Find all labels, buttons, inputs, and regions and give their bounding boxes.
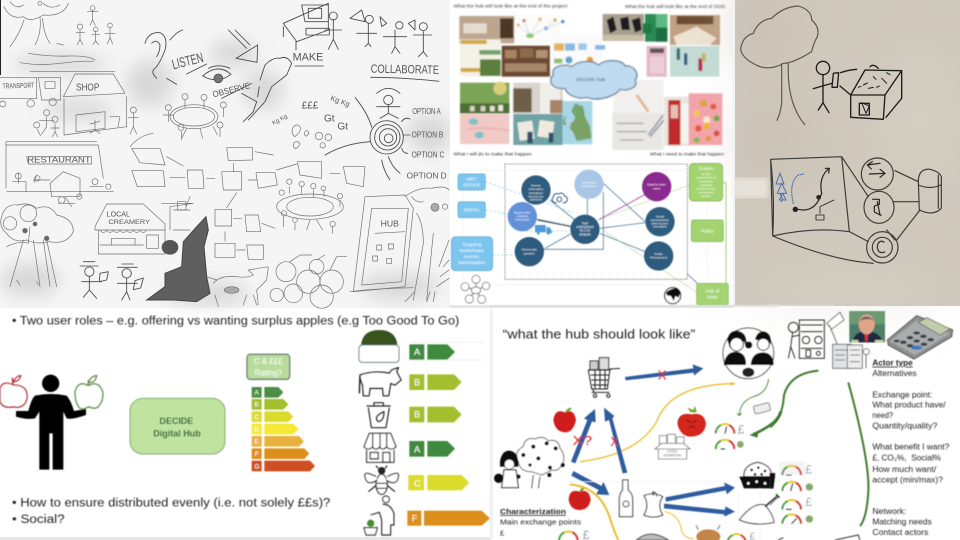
- node: social supermarkets: other buyers,: [651, 221, 669, 225]
- panel: whiteboard photo: [733, 0, 960, 306]
- sketch: hub phone and tree: [350, 187, 449, 302]
- text: characterization: £: [500, 528, 505, 537]
- box: MET OFFICE: MET: [467, 177, 477, 182]
- icon: banknote roll: [753, 403, 771, 414]
- sketch: collaborate with options spiral: COLLABORATE: [371, 62, 439, 77]
- image: portrait on money background: [849, 311, 885, 342]
- arrow: trolley to consumers, crossed: [625, 364, 703, 382]
- node: hub underpinned by LCA: underpinned: [576, 225, 594, 229]
- icon: consumers eating: [723, 328, 774, 379]
- node: hub underpinned by LCA: 'Hub': [581, 221, 588, 225]
- node: information: [574, 170, 604, 199]
- text: actor type and questions: Exchange point:: [872, 390, 932, 399]
- icon: small actor network: [461, 275, 490, 303]
- headings: end of project and end of 2025: What the hub will look like at the end of the project: [453, 3, 568, 9]
- icon: cloud sync: [552, 193, 567, 203]
- headings: end of project and end of 2025: What the hub will look like at the end of 2025: [625, 4, 725, 10]
- rating row: food waste F: F: [412, 514, 418, 524]
- sketch: transport truck and shop: SHOP: [76, 83, 100, 94]
- headings: what I will do and what I need: [453, 152, 724, 158]
- chart: energy style rating ladder A to G: F: [255, 451, 259, 458]
- bullets: even distribution and social: • Social?: [12, 512, 65, 526]
- sketch: hub phone and tree: HUB: [381, 219, 399, 229]
- box: DECIDE Digital Hub: [130, 398, 225, 454]
- icon: calculator: [887, 316, 953, 359]
- node: data for other users: Data for other: [648, 183, 666, 187]
- whiteboard: map and service diagram: [771, 157, 941, 263]
- arrow: core to cake: [665, 482, 735, 502]
- box: MET OFFICE: OFFICE: [463, 182, 480, 187]
- text: actor type and questions: £, CO₂%, Social%: [872, 453, 941, 462]
- connectors between network nodes: [485, 182, 726, 293]
- bullet: two user roles: • Two user roles – e.g. offering vs wanting surplus apples (e.g Too Good To Go): [12, 313, 459, 327]
- headings: end of project and end of 2025: [453, 3, 725, 10]
- sketch: transport truck and shop: [0, 72, 138, 137]
- icon: gauges with pound and money bag, top group: £: [738, 422, 745, 436]
- node: supply chain mapping: mapping: [517, 214, 528, 218]
- box: guides: (ie hub: [701, 172, 711, 176]
- icon: gauges with pound and money bag, lower group: £: [805, 495, 812, 509]
- sketch: lower left tree: [1, 204, 73, 287]
- node: farmer information: partners): [530, 198, 542, 202]
- icon: animal head: [696, 525, 720, 540]
- headings: what I will do and what I need: What I will do to make that happen: [453, 152, 532, 158]
- headings: what I will do and what I need: What I need to make that happen: [650, 152, 724, 158]
- arrow: processing to trolley, crossed: X: [610, 435, 619, 449]
- node: community growers: [515, 237, 544, 266]
- sketch: collaborate with options spiral: [325, 62, 447, 180]
- icon: cider bottle: [619, 480, 633, 517]
- chart: energy style rating ladder A to G: D: [254, 426, 259, 433]
- rating row: shop A: [364, 433, 455, 462]
- rating row: bee C: [365, 466, 469, 494]
- arrow: yellow path to consumers: [580, 384, 732, 462]
- rating row: land A: A: [414, 347, 421, 357]
- node: community growers: growers: [524, 251, 535, 255]
- sketch: money, hearts, carbon scribbles: Gt: [337, 121, 348, 132]
- text: characterization: Characterization: [500, 507, 566, 516]
- sketch: listen ear, observe eye, hand: OBSERVE: [211, 80, 251, 99]
- chart: energy style rating ladder A to G: C: [254, 414, 259, 421]
- image collage: end of project: [459, 14, 605, 145]
- box: guides: naturalism: [699, 179, 713, 183]
- box: policy: [691, 220, 723, 242]
- sketch: restaurant: RESTAURANT: [27, 155, 91, 165]
- icon: delivery truck: [535, 225, 552, 235]
- sketch: money, hearts, carbon scribbles: Kg Kg: [329, 93, 351, 109]
- panel: hub network diagram: [450, 152, 733, 308]
- text: characterization: Main exchange points: [500, 518, 581, 527]
- node: supply chain mapping: information: [515, 218, 530, 222]
- box: ongoing workshops: events,: [464, 254, 480, 260]
- icon: food donation box: DONATION: [664, 454, 682, 458]
- icon: stick figure at vending machine: [788, 320, 824, 358]
- icon: shopping trolley: [588, 358, 620, 397]
- sketch: collaborate with options spiral: OPTION C: [412, 150, 445, 159]
- icon: apple core: [644, 492, 663, 517]
- text: actor type and questions: What product have/: [872, 401, 946, 410]
- rating row: compost bin B: [367, 403, 462, 428]
- icon: food donation box: FOOD: [668, 450, 678, 454]
- chart: energy style rating ladder A to G: E: [254, 439, 259, 446]
- dotted boundary: [505, 164, 687, 279]
- box: DEFRA: DEFRA: [464, 207, 480, 212]
- node: farmer information: (including /: [529, 191, 543, 195]
- box: DEFRA: [458, 202, 485, 218]
- node: social supermarkets: Social: [656, 215, 664, 219]
- text: actor type and questions: accept (min/max)?: [872, 475, 944, 484]
- node: information: information: [582, 184, 597, 188]
- text: actor type and questions: Quantity/quality?: [872, 422, 938, 431]
- icon: angry apple: [677, 406, 706, 437]
- rating row: shop A: A: [414, 444, 421, 454]
- box outline around processed products: [567, 482, 780, 540]
- sketch: process flow boxes: [130, 133, 365, 259]
- node: public procurement: Public: [655, 252, 663, 256]
- text: actor type and questions: need?: [872, 411, 894, 420]
- arrow: green curve down to outcomes: [848, 382, 868, 526]
- box: ongoing workshops: participation: [459, 260, 486, 266]
- box: guides: aware): [701, 194, 711, 198]
- box: guides: contextually: [698, 190, 714, 194]
- panel: actor characteristics: [770, 305, 953, 540]
- sketch: money, hearts, carbon scribbles: £££: [302, 100, 319, 111]
- image collage: end of 2025: [603, 14, 722, 150]
- icon: money flag and tax desk: [827, 312, 869, 368]
- cloud: DECIDE Hub: [551, 61, 637, 99]
- node: data for other users: users: [653, 186, 661, 190]
- sketch: local creamery shop: CREAMERY: [108, 220, 150, 226]
- text: actor type and questions: Alternatives: [872, 369, 917, 378]
- node: hub underpinned by LCA: analysis: [579, 232, 591, 236]
- icon: cake: [739, 462, 775, 488]
- rating row: compost bin B: B: [414, 410, 420, 420]
- arrow: processing to trolley, crossed: [604, 408, 627, 473]
- sketch: transport truck and shop: TRANSPORT: [2, 81, 35, 91]
- icon: gauges with pound and money bag, lower group: [779, 462, 813, 524]
- icon: gauges with pound and money bag, top group: [716, 422, 745, 449]
- chart: energy style rating ladder A to G: A: [254, 390, 259, 397]
- icon: red apple: [553, 408, 576, 432]
- arrow: thick green into gauges: [753, 412, 781, 434]
- box: policy: Policy: [701, 228, 714, 233]
- node: public procurement: Procurement: [650, 256, 667, 260]
- box: guides: underpinned by: [696, 176, 717, 180]
- box: DECIDE Digital Hub: Digital Hub: [153, 428, 201, 438]
- text: characterization: [500, 507, 581, 537]
- box: guides: operating: [700, 183, 713, 187]
- box: guides: Guides: [699, 166, 714, 171]
- arrow: yellow thick path down: [570, 484, 618, 540]
- arrow: thick green head: [749, 431, 759, 438]
- box: hub of hubs: [697, 283, 728, 305]
- node: farmer information: Farmer: [531, 184, 541, 188]
- box: C and pounds rating question: [247, 354, 290, 379]
- panel: pencil sketch of the food hub: [0, 0, 453, 308]
- text: actor type and questions: Network:: [872, 507, 906, 516]
- icon: globe: [665, 288, 681, 304]
- icon: person weighing two apples: [0, 375, 103, 470]
- rating row: cow B: [359, 368, 462, 396]
- node: social supermarkets: supermarkets,: [651, 218, 670, 222]
- node: information: Information: [582, 180, 596, 184]
- sketch: second round table: [277, 179, 343, 233]
- sketch: money, hearts, carbon scribbles: Gt: [324, 114, 335, 125]
- box: guides: [689, 163, 723, 201]
- box: ongoing workshops: [451, 237, 493, 271]
- bullets: even distribution and social: [12, 495, 331, 526]
- node: supply chain mapping: [508, 202, 537, 231]
- text: actor type and questions: Contact actors: [872, 528, 928, 537]
- arrow: thin yellow to livestock: [665, 512, 693, 539]
- text: actor type and questions: Matching needs: [872, 518, 932, 527]
- icon: gauges with pound and money bag, lower group: £: [805, 463, 812, 477]
- icon: apple below tree: [569, 487, 591, 510]
- sketch: listen ear, observe eye, hand: LISTEN: [170, 49, 205, 72]
- heading: what the hub should look like: “what the hub should look like”: [503, 327, 695, 341]
- sketch: two people with notes, hill and cow: [80, 217, 268, 307]
- arrow: green consumer flow down: [737, 379, 769, 416]
- sketch: make, computer and stick figures: MAKE: [293, 52, 323, 64]
- box: ongoing workshops: workshops,: [459, 248, 485, 254]
- icon: cake and compost edge: [770, 473, 778, 505]
- node: farmer information: information: [529, 187, 544, 191]
- cloud: DECIDE Hub: DECIDE Hub: [576, 77, 606, 82]
- sketch: money, hearts, carbon scribbles: [271, 93, 351, 149]
- rating row: bee C: C: [414, 478, 421, 488]
- arrow: core to compost: [664, 504, 735, 517]
- node: social supermarkets: innovators: [653, 225, 667, 229]
- text: actor type and questions: [872, 359, 950, 537]
- icon: partial notebook at bottom: [778, 535, 860, 540]
- box: C and pounds rating question: C & £££: [254, 357, 283, 366]
- bullets: even distribution and social: • How to ensure distributed evenly (i.e. not solely ££s)?: [12, 495, 331, 509]
- panel: what the hub should look like: [490, 305, 781, 540]
- node: farmer information: [521, 175, 551, 205]
- box: DECIDE Digital Hub: DECIDE: [159, 416, 193, 426]
- icon: food donation box: [655, 434, 690, 459]
- rating row: food waste F: [364, 496, 490, 535]
- box: ongoing workshops: Ongoing: [463, 242, 481, 248]
- arrow: tree to cider: [571, 471, 609, 495]
- node: community growers: Community: [522, 248, 537, 252]
- sketch: pile of apples: [270, 255, 347, 308]
- node: supply chain mapping: Supply chain: [514, 210, 531, 214]
- node: hub underpinned by LCA: [570, 215, 600, 244]
- box: hub of hubs: Hubs: [707, 294, 718, 299]
- arrow: tree to trolley, questioned: X?: [573, 434, 592, 448]
- node: social supermarkets: [645, 207, 675, 236]
- node: farmer information: beyond our: [529, 194, 543, 198]
- whiteboard: blue trees and dotted path: [776, 173, 804, 203]
- icon: bottom gauge and pound: [559, 528, 755, 540]
- text: actor type and questions: Actor type: [872, 359, 913, 368]
- panel: user roles and rating: [0, 313, 490, 540]
- icon: compost pile with shovel: [739, 494, 779, 524]
- sketch: make, computer and stick figures: [283, 3, 432, 66]
- arrow: yellow head to consumers: [731, 382, 736, 386]
- sketch: money, hearts, carbon scribbles: Kg Kg: [271, 114, 289, 127]
- box: guides: principles and: [697, 187, 716, 191]
- node: public procurement: [644, 241, 673, 271]
- icon: farmer and apple tree: [494, 437, 565, 488]
- rating row: land A: [359, 330, 483, 362]
- chart: energy style rating ladder A to G: G: [254, 463, 260, 470]
- sketch: listen ear, observe eye, hand: [145, 30, 292, 122]
- node: data for other users: [642, 172, 671, 201]
- arrow: tree to trolley, questioned: [571, 409, 596, 463]
- panel: hub vision mood board: [450, 0, 733, 156]
- sketch: round table meeting: [163, 94, 226, 140]
- box: MET OFFICE: [458, 174, 485, 190]
- box: hub of hubs: Hub of: [705, 289, 719, 294]
- sketch: collaborate with options spiral: OPTION D: [407, 171, 447, 180]
- arrow: trolley to consumers, crossed: X: [658, 367, 667, 382]
- arrow: green curve from network: [770, 371, 818, 427]
- whiteboard: tree: [741, 6, 818, 125]
- chart: energy style rating ladder A to G: B: [254, 402, 259, 409]
- text: actor type and questions: How much want/: [872, 465, 937, 474]
- sketch: local creamery shop: LOCAL: [107, 210, 130, 219]
- node: hub underpinned by LCA: by LCA: [580, 229, 591, 233]
- sketch: local creamery shop: [95, 197, 193, 254]
- whiteboard: stick person with phone and smart box: [813, 61, 902, 119]
- sketch: top left tree and people: [4, 1, 115, 65]
- text: actor type and questions: What benefit I want?: [872, 442, 950, 451]
- sketch: restaurant: [6, 142, 113, 207]
- icon: leftover pile: [637, 534, 668, 540]
- sketch: collaborate with options spiral: OPTION A: [412, 107, 441, 116]
- chart: energy style rating ladder A to G: [252, 387, 315, 471]
- box: C and pounds rating question: Rating?: [255, 368, 283, 377]
- sketch: collaborate with options spiral: OPTION B: [412, 130, 443, 139]
- rating row: cow B: B: [414, 377, 420, 387]
